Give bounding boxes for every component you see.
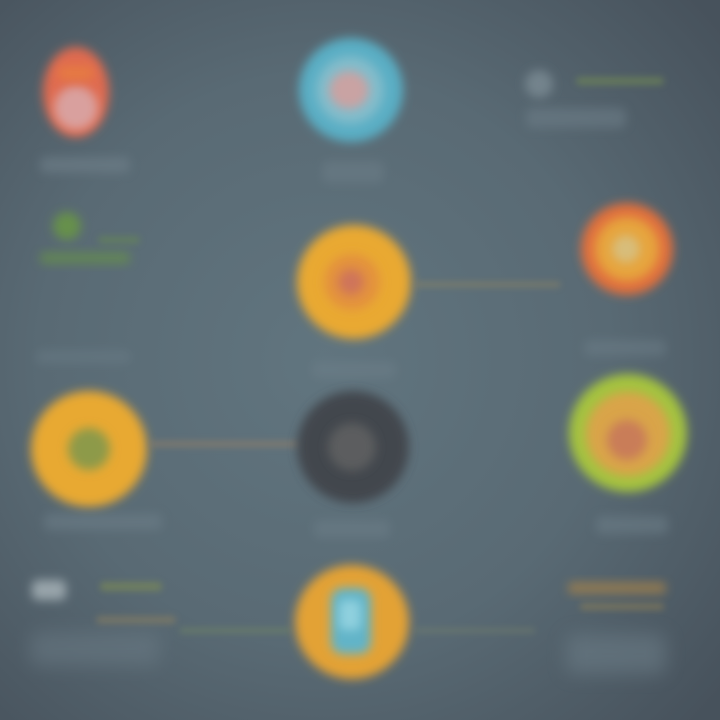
caption: left lower [44, 514, 162, 530]
arrow: lower left to bottom circle [180, 628, 290, 633]
text block: lower right [566, 582, 666, 674]
text block: upper left green [36, 212, 140, 364]
icon: centre dark circle [297, 391, 409, 503]
text block: top right [525, 70, 664, 128]
icon: left orange circle [31, 391, 147, 507]
icon: top centre blue circle [299, 38, 403, 142]
arrow: centre to right orange badge [415, 282, 560, 287]
icon: right green circle [569, 374, 687, 492]
text block: lower left [30, 580, 176, 666]
caption: right upper [584, 340, 666, 356]
arrow: left circle to dark circle [150, 441, 300, 447]
caption: top centre [322, 161, 384, 183]
caption: top left [40, 157, 130, 173]
caption: right lower [596, 516, 668, 534]
icon: bottom orange circle with phone [295, 565, 409, 679]
icon: centre orange circle [297, 225, 411, 339]
icon: top left red badge [43, 47, 109, 137]
icon: right orange badge [581, 203, 673, 295]
arrow: bottom circle to lower right [415, 628, 535, 633]
caption: centre lower [314, 520, 390, 538]
caption: centre [312, 362, 396, 378]
